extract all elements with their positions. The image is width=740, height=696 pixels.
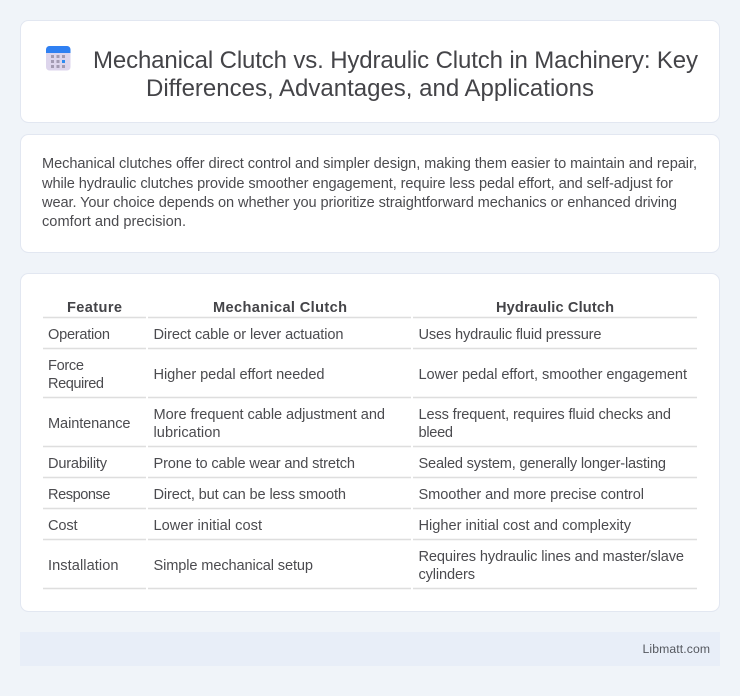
row: maintenance: More frequent cable adjustment and: [154, 407, 385, 423]
row: force required: Lower pedal effort, smoother engagement: [418, 367, 687, 383]
panel: comparison table: [20, 274, 720, 612]
table header: Hydraulic Clutch: [496, 300, 614, 316]
footer credit: Libmatt.com: [642, 642, 710, 656]
intro text: wear. Your choice depends on whether you prioritize straightforward mechanics or enhanced driving: [41, 195, 677, 211]
row: cost: Lower initial cost: [154, 518, 262, 534]
panel: title card: [20, 20, 720, 122]
row: durability: Sealed system, generally longer-lasting: [418, 456, 666, 472]
row: operation: Operation: [48, 327, 110, 343]
row: response: Direct, but can be less smooth: [154, 487, 346, 503]
row: maintenance: lubrication: [154, 425, 220, 441]
intro text: while hydraulic clutches provide smoother engagement, require less pedal effort, and self-adjust for: [41, 176, 673, 192]
row: force required: Required: [48, 376, 104, 392]
title: [93, 47, 698, 102]
row: force required: [48, 358, 687, 392]
table header: Mechanical Clutch: [213, 300, 347, 316]
row: durability: [48, 456, 666, 472]
row: installation: Simple mechanical setup: [154, 558, 313, 574]
panel: introduction: [20, 134, 720, 252]
row: maintenance: bleed: [418, 425, 453, 441]
row: installation: Requires hydraulic lines and master/slave: [418, 549, 684, 565]
row: installation: Installation: [48, 558, 118, 574]
row: operation: [48, 327, 602, 343]
title: Mechanical Clutch vs. Hydraulic Clutch in Machinery: Key: [93, 47, 698, 74]
row: durability: Prone to cable wear and stretch: [154, 456, 355, 472]
row: response: Response: [48, 487, 110, 503]
table header: Feature: [67, 300, 122, 316]
row: maintenance: Maintenance: [48, 416, 130, 432]
intro text: [41, 156, 697, 230]
row: operation: Uses hydraulic fluid pressure: [418, 327, 602, 343]
row: cost: [48, 518, 632, 534]
row: response: Smoother and more precise control: [418, 487, 644, 503]
row: installation: cylinders: [418, 567, 475, 583]
row: durability: Durability: [48, 456, 108, 472]
intro text: comfort and precision.: [42, 214, 186, 230]
footer: [20, 632, 720, 666]
row: force required: Higher pedal effort needed: [154, 367, 324, 383]
title: Differences, Advantages, and Applications: [146, 75, 594, 102]
row: force required: Force: [48, 358, 84, 374]
row: maintenance: Less frequent, requires fluid checks and: [418, 407, 671, 423]
row: cost: Higher initial cost and complexity: [418, 518, 632, 534]
table header: [67, 300, 614, 316]
row: maintenance: [48, 407, 671, 441]
intro text: Mechanical clutches offer direct control and simpler design, making them easier to maintain and repair,: [42, 156, 697, 172]
row: cost: Cost: [48, 518, 78, 534]
icon: calendar: [46, 46, 70, 70]
row: response: [48, 487, 644, 503]
row: operation: Direct cable or lever actuation: [154, 327, 344, 343]
row: installation: [48, 549, 684, 583]
